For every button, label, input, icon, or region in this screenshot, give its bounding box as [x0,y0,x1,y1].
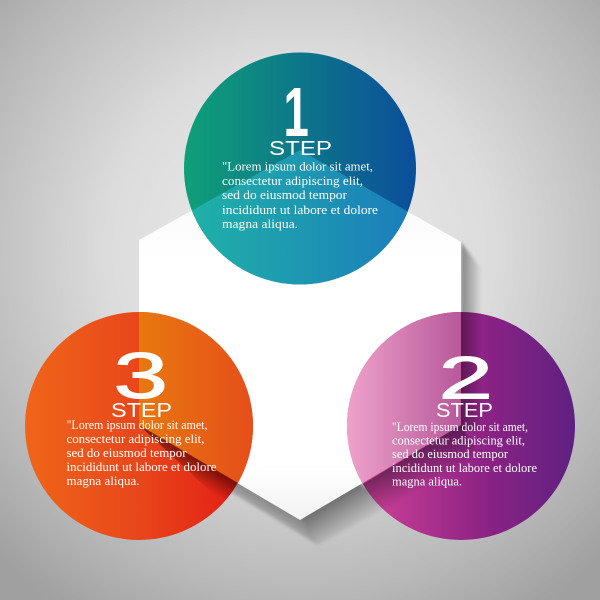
body text 3: consectetur adipiscing elit, [66,432,204,446]
body text 1: magna aliqua. [222,217,298,231]
body text 3: magna aliqua. [66,474,140,488]
circle 3 overlap with hexagon [139,312,253,484]
body text 1 [222,160,378,231]
number 3: 3 [114,339,168,412]
body text 2: sed do eiusmod tempor [392,447,509,461]
label step 3: STEP [111,400,172,422]
circle 1 base [184,52,416,284]
circle: step 1 [184,52,416,284]
body text 3: incididunt ut labore et dolore [66,460,217,474]
hexagon panel [139,150,461,520]
circle: step 3 [25,312,253,540]
label step 2: STEP [436,400,493,422]
circle 3 edge shadow [140,426,238,500]
label step 1: STEP [269,138,332,160]
body text 2: consectetur adipiscing elit, [392,434,525,448]
body text 1: "Lorem ipsum dolor sit amet, [222,160,373,174]
number 2: 2 [438,344,493,412]
circle 1 overlap with hexagon [192,150,408,284]
number 1: 1 [284,75,309,151]
circle 2 overlap with hexagon [347,312,461,483]
body text 2: "Lorem ipsum dolor sit amet, [392,420,528,434]
circle 2 edge shadows [363,310,482,520]
body text 3: sed do eiusmod tempor [66,446,187,460]
body text 1: consectetur adipiscing elit, [222,174,363,188]
body text 2 [392,420,537,488]
body text 3 [66,418,217,488]
body text 2: incididunt ut labore et dolore [392,461,537,475]
body text 2: magna aliqua. [392,474,462,488]
body text 1: incididunt ut labore et dolore [222,203,378,217]
body text 3: "Lorem ipsum dolor sit amet, [66,418,208,432]
hexagon drop shadow [150,242,482,545]
circle: step 2 [347,310,575,540]
circle 2 base [347,312,575,540]
circle 3 base [25,312,253,540]
body text 1: sed do eiusmod tempor [222,188,348,202]
